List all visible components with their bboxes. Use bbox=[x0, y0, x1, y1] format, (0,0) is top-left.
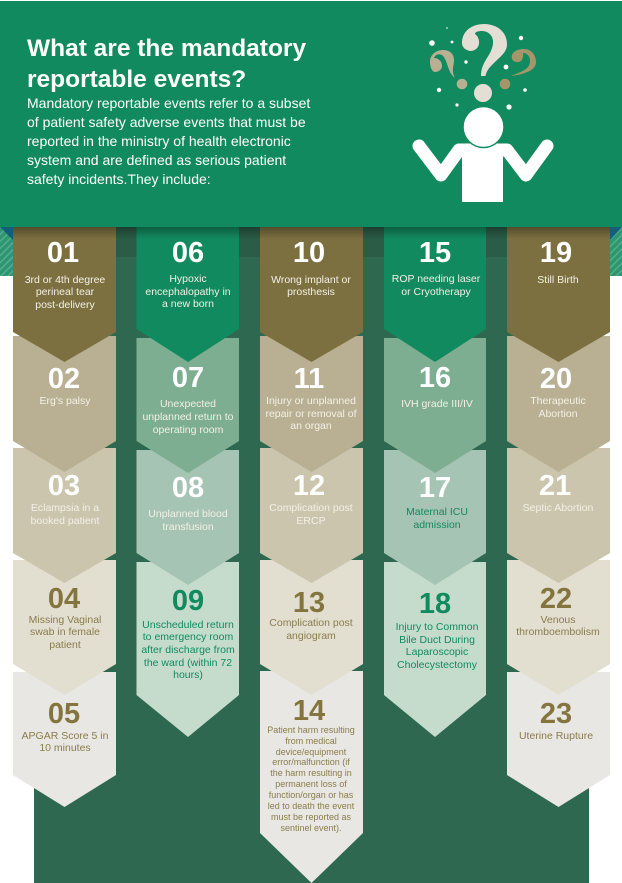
item 09: 09 bbox=[172, 585, 204, 617]
item 09: Unscheduled return bbox=[142, 619, 234, 631]
item 01 bbox=[13, 227, 116, 362]
item 20: 20 bbox=[540, 363, 572, 395]
item 06: a new born bbox=[162, 298, 214, 310]
item 03: booked patient bbox=[31, 515, 100, 527]
item 14: 14 bbox=[293, 695, 325, 727]
item 20: Therapeutic bbox=[530, 395, 586, 407]
intro text bbox=[27, 95, 310, 187]
item 18: Cholecystectomy bbox=[397, 659, 478, 671]
item 07: unplanned return to bbox=[142, 411, 234, 423]
item 05: 05 bbox=[48, 698, 80, 730]
intro text: safety incidents.They include: bbox=[27, 171, 211, 187]
intro text: system and are defined as serious patient bbox=[27, 152, 286, 168]
item 03 bbox=[13, 448, 116, 583]
item 08: Unplanned blood bbox=[148, 508, 228, 520]
icon: shrugging person bbox=[419, 106, 547, 202]
item 10: 10 bbox=[293, 237, 325, 269]
item 20: Abortion bbox=[538, 408, 578, 420]
item 18 bbox=[384, 562, 486, 737]
item 11: Injury or unplanned bbox=[266, 395, 356, 407]
item 14: permanent loss of bbox=[275, 779, 347, 789]
item 13 bbox=[260, 560, 363, 695]
item 09: hours) bbox=[173, 669, 203, 681]
item 18: 18 bbox=[419, 588, 451, 620]
item 08: 08 bbox=[172, 472, 204, 504]
title: reportable events? bbox=[27, 66, 246, 93]
item 09 bbox=[136, 562, 239, 737]
item 09: to emergency room bbox=[143, 631, 233, 643]
item 22 bbox=[507, 560, 610, 695]
item 13: Complication post bbox=[269, 617, 353, 629]
item 18: Laparoscopic bbox=[406, 646, 468, 658]
item 19: 19 bbox=[540, 237, 572, 269]
item 16: 16 bbox=[419, 362, 451, 394]
item 17: 17 bbox=[419, 472, 451, 504]
item 23: Uterine Rupture bbox=[519, 730, 593, 742]
column 1: items 01 to 05 bbox=[13, 227, 116, 807]
icon: question marks and dots bbox=[429, 24, 536, 110]
item 15 bbox=[384, 227, 486, 362]
item 21: 21 bbox=[539, 470, 571, 502]
column 2: items 06 to 09 bbox=[136, 227, 239, 737]
item 08: transfusion bbox=[162, 521, 214, 533]
item 19: Still Birth bbox=[537, 274, 579, 286]
item 13: 13 bbox=[293, 587, 325, 619]
item 01: 01 bbox=[47, 237, 79, 269]
intro text: reported in the ministry of health electronic bbox=[27, 133, 291, 149]
item 18: Bile Duct During bbox=[399, 634, 475, 646]
item 11: repair or removal of bbox=[265, 408, 357, 420]
column 3: items 10 to 14 bbox=[260, 227, 363, 883]
item 06 bbox=[136, 227, 239, 362]
item 21 bbox=[507, 448, 610, 583]
item 14: from medical bbox=[285, 736, 337, 746]
item 17: Maternal ICU bbox=[406, 506, 468, 518]
item 14: function/organ or has bbox=[269, 790, 354, 800]
item 12: 12 bbox=[293, 470, 325, 502]
item 09: after discharge from bbox=[141, 644, 235, 656]
item 14: Patient harm resulting bbox=[267, 725, 355, 735]
item 14 bbox=[260, 671, 363, 883]
right ribbon fold bbox=[610, 227, 622, 276]
header panel bbox=[0, 1, 622, 227]
item 23 bbox=[507, 672, 610, 807]
item 06: encephalopathy in bbox=[145, 286, 231, 298]
item 11: an organ bbox=[290, 420, 332, 432]
item 13: angiogram bbox=[286, 630, 336, 642]
item 15: ROP needing laser bbox=[392, 273, 481, 285]
item 07: operating room bbox=[153, 424, 224, 436]
item 07: 07 bbox=[172, 362, 204, 394]
item 14: the harm resulting in bbox=[270, 768, 352, 778]
column 4: items 15 to 18 bbox=[384, 227, 486, 737]
item 09: the ward (within 72 bbox=[144, 657, 232, 669]
item 12: Complication post bbox=[269, 502, 353, 514]
item 05: APGAR Score 5 in bbox=[22, 730, 109, 742]
item 14: device/equipment bbox=[276, 747, 347, 757]
item 11 bbox=[260, 336, 363, 472]
dark green background panel bbox=[34, 227, 589, 883]
item 05: 10 minutes bbox=[39, 742, 91, 754]
item 10 bbox=[260, 227, 363, 362]
item 10: prosthesis bbox=[287, 286, 335, 298]
item 07: Unexpected bbox=[160, 398, 216, 410]
item 15: 15 bbox=[419, 237, 451, 269]
item 17 bbox=[384, 450, 486, 585]
item 07 bbox=[136, 338, 239, 473]
item 22: Venous bbox=[540, 614, 576, 626]
item 14: must be reported as bbox=[271, 812, 352, 822]
item 06: Hypoxic bbox=[169, 273, 207, 285]
item 05 bbox=[13, 672, 116, 807]
intro text: Mandatory reportable events refer to a subset bbox=[27, 95, 310, 111]
item 16 bbox=[384, 338, 486, 473]
item 02: 02 bbox=[48, 363, 80, 395]
item 10: Wrong implant or bbox=[271, 274, 351, 286]
item 18: Injury to Common bbox=[396, 621, 479, 633]
item 01: post-delivery bbox=[35, 299, 96, 311]
item 02 bbox=[13, 336, 116, 472]
item 04: 04 bbox=[48, 583, 80, 615]
item 20 bbox=[507, 336, 610, 472]
item 19 bbox=[507, 227, 610, 362]
item 12: ERCP bbox=[296, 515, 326, 527]
item 04: patient bbox=[49, 639, 81, 651]
column 5: items 19 to 23 bbox=[507, 227, 610, 807]
item 14: led to death the event bbox=[268, 801, 355, 811]
item 03: Eclampsia in a bbox=[31, 502, 99, 514]
left ribbon fold bbox=[0, 227, 13, 276]
item 17: admission bbox=[413, 519, 461, 531]
item 08 bbox=[136, 450, 239, 585]
title: What are the mandatory bbox=[27, 35, 306, 62]
item 23: 23 bbox=[540, 698, 572, 730]
item 14: sentinel event). bbox=[280, 823, 342, 833]
item 02: Erg's palsy bbox=[39, 395, 91, 407]
item 01: 3rd or 4th degree bbox=[25, 274, 105, 286]
item 04 bbox=[13, 560, 116, 695]
item 01: perineal tear bbox=[36, 286, 95, 298]
item 11: 11 bbox=[294, 363, 324, 395]
item 04: Missing Vaginal bbox=[29, 614, 101, 626]
item 14: error/malfunction (if bbox=[272, 757, 350, 767]
item 22: 22 bbox=[540, 583, 572, 615]
item 04: swab in female bbox=[30, 626, 100, 638]
item 21: Septic Abortion bbox=[523, 502, 593, 514]
intro text: of patient safety adverse events that must be bbox=[27, 114, 306, 130]
item 12 bbox=[260, 448, 363, 583]
item 15: or Cryotherapy bbox=[401, 286, 471, 298]
item 22: thromboembolism bbox=[516, 626, 600, 638]
item 06: 06 bbox=[172, 237, 204, 269]
item 16: IVH grade III/IV bbox=[401, 398, 473, 410]
item 03: 03 bbox=[48, 470, 80, 502]
title bbox=[27, 35, 306, 93]
